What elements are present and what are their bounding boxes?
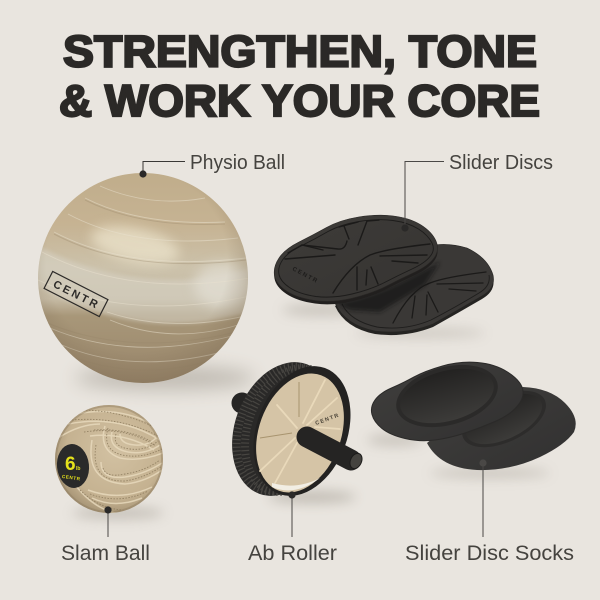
callout: slam ball bbox=[61, 506, 150, 565]
top disc bbox=[274, 215, 438, 304]
product: slider disc socks bbox=[367, 355, 576, 478]
brand logo: CENTR: CENTR bbox=[51, 278, 102, 312]
weight label: 6 lb: lb bbox=[76, 466, 80, 472]
weight label: 6 lb: CENTR bbox=[62, 474, 81, 481]
top sock bbox=[371, 355, 523, 441]
title: & WORK YOUR CORE bbox=[59, 77, 540, 126]
left handle bbox=[242, 403, 265, 412]
logo: CENTR on disc: CENTR bbox=[291, 266, 319, 285]
product: physio ball bbox=[36, 173, 255, 390]
title: STRENGTHEN, TONE bbox=[63, 28, 537, 76]
right handle bbox=[307, 437, 364, 471]
callout: ab roller: Ab Roller bbox=[248, 542, 337, 565]
callout: slider disc socks: Slider Disc Socks bbox=[405, 542, 574, 565]
weight label: 6 lb: 6 bbox=[65, 454, 76, 475]
logo: CENTR on wheel: CENTR bbox=[315, 413, 341, 427]
callout: slider discs bbox=[401, 152, 553, 232]
callout: slider discs: Slider Discs bbox=[449, 152, 553, 174]
wheel rim and face bbox=[236, 352, 368, 510]
title bbox=[59, 28, 540, 126]
callout: physio ball: Physio Ball bbox=[190, 152, 285, 174]
bottom sock bbox=[427, 379, 576, 470]
bottom disc bbox=[335, 244, 494, 335]
callout: physio ball bbox=[139, 152, 285, 178]
disc contact shadow bbox=[335, 262, 440, 312]
callout: slam ball: Slam Ball bbox=[61, 542, 150, 565]
callout: ab roller bbox=[248, 491, 337, 565]
weight label: 6 lb bbox=[55, 442, 91, 490]
product: slider discs bbox=[274, 215, 494, 338]
product: slam ball bbox=[55, 405, 164, 519]
callout: slider disc socks bbox=[405, 459, 574, 565]
brand logo: CENTR bbox=[44, 271, 108, 317]
wheel tread bbox=[214, 348, 352, 510]
product: ab roller bbox=[214, 348, 368, 510]
